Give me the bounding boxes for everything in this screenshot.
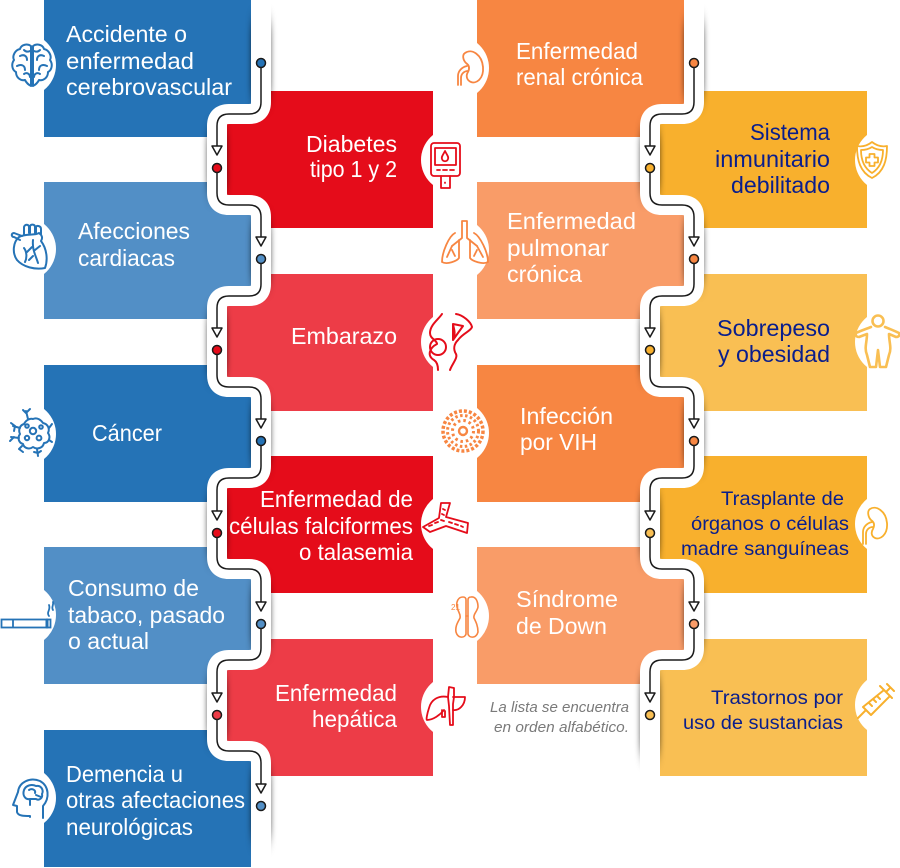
- panel: Embarazo: [217, 274, 485, 411]
- panel: Consumo de tabaco: tabaco, pasado: [68, 602, 225, 628]
- panel: Infección por VIH: por VIH: [520, 429, 597, 455]
- panel: Consumo de tabaco: Consumo de: [68, 575, 199, 601]
- panel: Afecciones cardiacas: cardiacas: [78, 245, 175, 271]
- panel: Consumo de tabaco: o actual: [68, 628, 149, 654]
- icon: cigarette: [2, 602, 53, 628]
- panel: Infección por VIH: Infección: [520, 403, 613, 429]
- panel: Enfermedad renal crónica: [425, 0, 694, 137]
- panel: Consumo de tabaco: [0, 547, 261, 684]
- icon: shield: [857, 142, 887, 178]
- panel: Accidente o enfermedad cerebrovascular: cerebrovascular: [66, 74, 232, 100]
- panel: Trastornos por uso de sustancias: uso de sustancias: [683, 712, 843, 734]
- panel: Trastornos por uso de sustancias: Trastornos por: [711, 687, 844, 709]
- connector: right column: [640, 0, 704, 780]
- panel: Enfermedad hepática: Enfermedad: [275, 680, 397, 706]
- panel: Enfermedad de células falciformes: Enfermedad de: [260, 486, 413, 512]
- panel: Afecciones cardiacas: [0, 182, 261, 319]
- panel: Demencia: otras afectaciones: [66, 787, 245, 813]
- icon: kidney transplant: [863, 508, 887, 544]
- panel: Sistema inmunitario debilitado: inmunitario: [715, 146, 830, 172]
- panel: Trastornos por uso de sustancias: [650, 639, 900, 776]
- panel: Enfermedad pulmonar crónica: [425, 182, 694, 319]
- icon: virus: [443, 411, 483, 451]
- panel: Enfermedad hepática: hepática: [312, 706, 397, 732]
- icon: glucose meter: [431, 143, 460, 188]
- panel: Demencia: neurológicas: [66, 814, 193, 840]
- icon: chromosome 21: [456, 597, 478, 637]
- panel: Demencia: Demencia u: [66, 761, 183, 787]
- panel: Trasplante: [650, 456, 900, 593]
- panel: Síndrome de Down: [425, 547, 694, 684]
- panel: Enfermedad de células falciformes: o talasemia: [299, 539, 413, 565]
- note: orden alfabético: La lista se encuentra: [490, 700, 629, 716]
- connector: left column: [207, 0, 271, 868]
- panel: Enfermedad hepática: [217, 639, 485, 776]
- icon: syringe: [858, 684, 894, 718]
- panel: Diabetes: [217, 91, 485, 228]
- panel: Sobrepeso y obesidad: Sobrepeso: [717, 315, 830, 341]
- panel: Cáncer: [0, 365, 261, 502]
- icon: brain: [12, 45, 52, 86]
- icon: blood vessel with sickle cells: [423, 503, 468, 533]
- panel: Cáncer: Cáncer: [92, 420, 162, 446]
- panel: Enfermedad de células falciformes: [217, 456, 485, 593]
- icon: liver: [427, 687, 465, 725]
- panel: Afecciones cardiacas: Afecciones: [78, 218, 190, 244]
- panel: Accidente o enfermedad cerebrovascular: [0, 0, 261, 137]
- panel: Accidente o enfermedad cerebrovascular: Accidente o: [66, 21, 187, 47]
- panel: Síndrome de Down: 21: [451, 603, 461, 612]
- panel: Demencia: [0, 730, 261, 867]
- panel: Síndrome de Down: Síndrome: [516, 586, 618, 612]
- panel: Enfermedad de células falciformes: células falciformes: [229, 513, 413, 539]
- icon: heart: [12, 225, 47, 269]
- icon: kidney: [458, 51, 483, 85]
- panel: Sobrepeso y obesidad: y obesidad: [718, 341, 830, 367]
- panel: Sistema inmunitario debilitado: [650, 91, 900, 228]
- panel: Síndrome de Down: de Down: [516, 613, 607, 639]
- panel: Sistema inmunitario debilitado: debilitado: [731, 172, 830, 198]
- panel: Diabetes: tipo 1 y 2: [310, 156, 397, 182]
- panel: Sistema inmunitario debilitado: Sistema: [750, 119, 830, 145]
- panel: Embarazo: Embarazo: [291, 323, 397, 349]
- icon: pregnant body: [430, 314, 472, 370]
- icon: cancer cell: [10, 409, 52, 456]
- panel: Infección por VIH: [425, 365, 694, 502]
- panel: Enfermedad renal crónica: renal crónica: [516, 64, 643, 90]
- panel: Enfermedad pulmonar crónica: crónica: [507, 261, 582, 287]
- panel: Trasplante: Trasplante de: [721, 488, 844, 510]
- icon: overweight person: [856, 316, 899, 367]
- icon: head with brain: [13, 780, 48, 818]
- panel: Trasplante: madre sanguíneas: [681, 538, 849, 560]
- note: orden alfabético: en orden alfabético.: [494, 720, 629, 736]
- panel: Enfermedad pulmonar crónica: Enfermedad: [507, 208, 636, 234]
- panel: Trasplante: órganos o células: [691, 513, 849, 535]
- panel: Accidente o enfermedad cerebrovascular: enfermedad: [66, 48, 194, 74]
- note: orden alfabético: [490, 700, 629, 736]
- panel: Enfermedad renal crónica: Enfermedad: [516, 38, 638, 64]
- panel: Enfermedad pulmonar crónica: pulmonar: [507, 235, 609, 261]
- panel: Diabetes: Diabetes: [306, 131, 397, 157]
- icon: lungs: [442, 221, 488, 263]
- panel: Sobrepeso y obesidad: [650, 274, 900, 411]
